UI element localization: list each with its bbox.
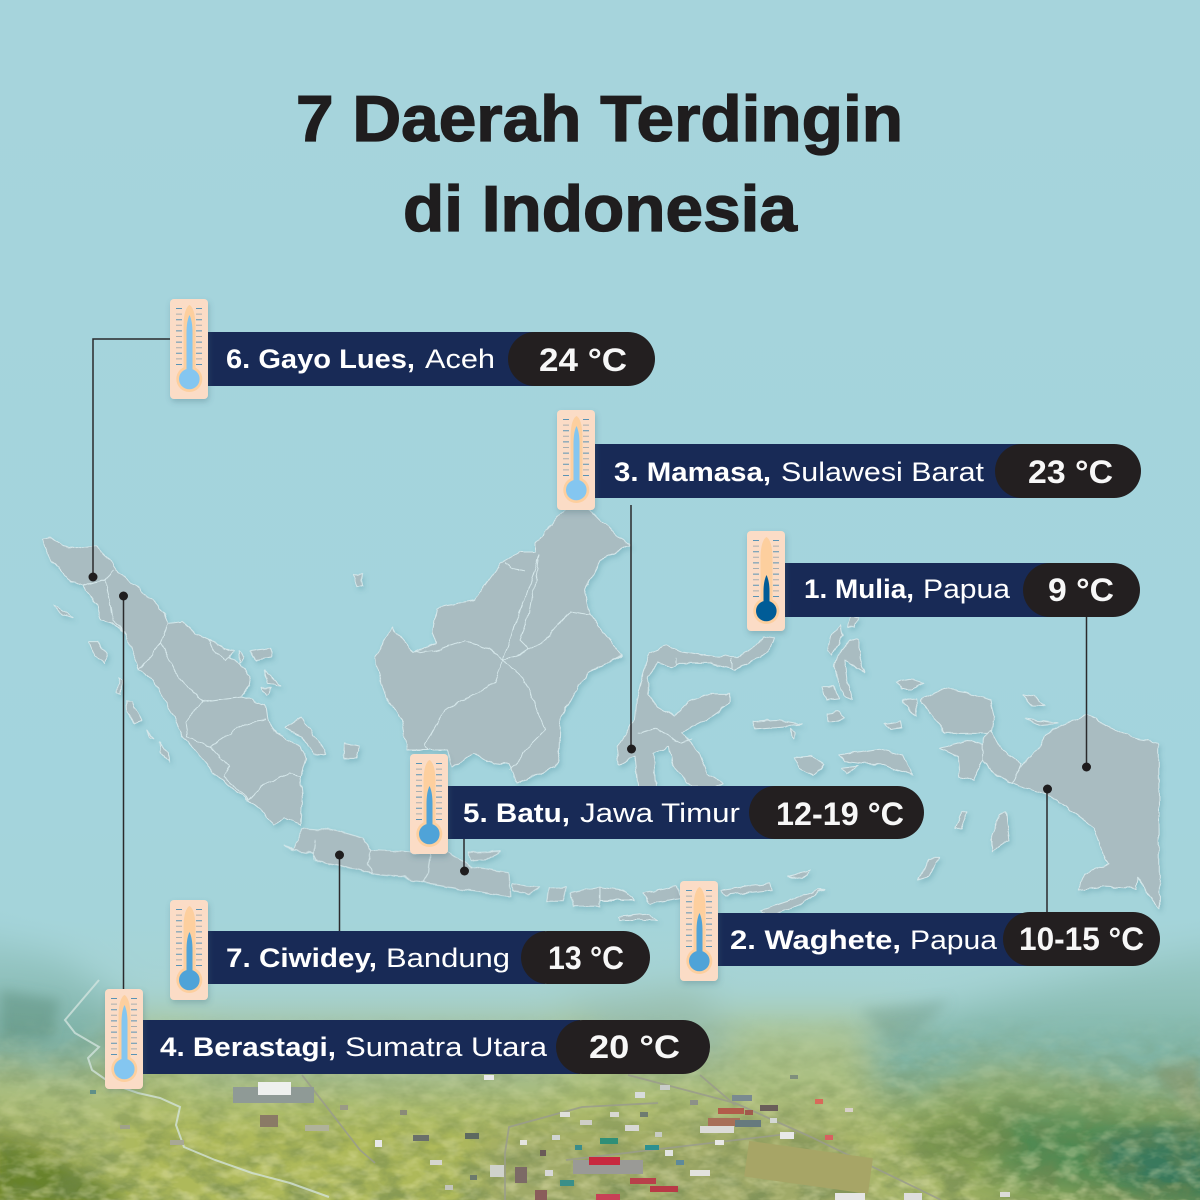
icon: thermometer 4 [105, 989, 143, 1089]
icon: thermometer 2 [680, 881, 718, 981]
title: di Indonesia [403, 172, 798, 245]
icon: thermometer 7 [170, 900, 208, 1000]
map of Indonesia [41, 505, 1159, 920]
label: 5. Batu: 12-19 °C [776, 796, 904, 832]
label: 7. Ciwidey: 13 °C [548, 940, 624, 976]
icon: thermometer 3 [557, 410, 595, 510]
label: 6. Gayo Lues: 6. Gayo Lues, [226, 344, 415, 374]
label: 4. Berastagi: Sumatra Utara [345, 1032, 548, 1062]
label: 3. Mamasa: 23 °C [1028, 454, 1113, 490]
label: 5. Batu [445, 786, 924, 839]
title: 7 Daerah Terdingin [296, 82, 903, 155]
label: 3. Mamasa: 3. Mamasa, [614, 457, 771, 487]
label: 1. Mulia: 9 °C [1048, 572, 1114, 608]
label: 7. Ciwidey: 7. Ciwidey, [226, 943, 377, 973]
label: 6. Gayo Lues: Aceh [425, 344, 495, 374]
map: Java and Nusa Tenggara west [285, 828, 600, 907]
label: 2. Waghete: 10-15 °C [1019, 921, 1144, 957]
buildings and fields [90, 1075, 1010, 1200]
label: 6. Gayo Lues: 24 °C [539, 342, 627, 378]
river [65, 980, 329, 1197]
label: 2. Waghete [715, 912, 1160, 966]
label: 4. Berastagi: 20 °C [589, 1029, 680, 1065]
map: Sumatra [41, 537, 364, 827]
label: 1. Mulia: 1. Mulia, [804, 574, 914, 604]
label: 3. Mamasa: Sulawesi Barat [781, 457, 985, 487]
label: 5. Batu: 5. Batu, [463, 798, 570, 828]
label: 4. Berastagi [140, 1020, 710, 1074]
map: Sulawesi and Maluku [600, 617, 1059, 920]
connector lines and location dots [88, 339, 1091, 990]
icon: thermometer 1 [747, 531, 785, 631]
map: Kalimantan [375, 505, 630, 783]
label: 5. Batu: Jawa Timur [580, 798, 740, 828]
icon: thermometer 6 [170, 299, 208, 399]
label: 2. Waghete: Papua [910, 925, 998, 955]
label: 4. Berastagi: 4. Berastagi, [160, 1032, 336, 1062]
label: 7. Ciwidey [205, 931, 650, 984]
label: 2. Waghete: 2. Waghete, [730, 925, 901, 955]
map: Papua [902, 688, 1159, 908]
label: 1. Mulia: Papua [923, 574, 1011, 604]
label: 6. Gayo Lues [205, 332, 655, 386]
label: 3. Mamasa [592, 444, 1141, 498]
label: 1. Mulia [782, 563, 1140, 617]
background: sky and mountain valley landscape [0, 931, 1200, 1200]
label: 7. Ciwidey: Bandung [386, 943, 510, 973]
roads [302, 1075, 941, 1200]
title [296, 82, 903, 245]
icon: thermometer 5 [410, 754, 448, 854]
